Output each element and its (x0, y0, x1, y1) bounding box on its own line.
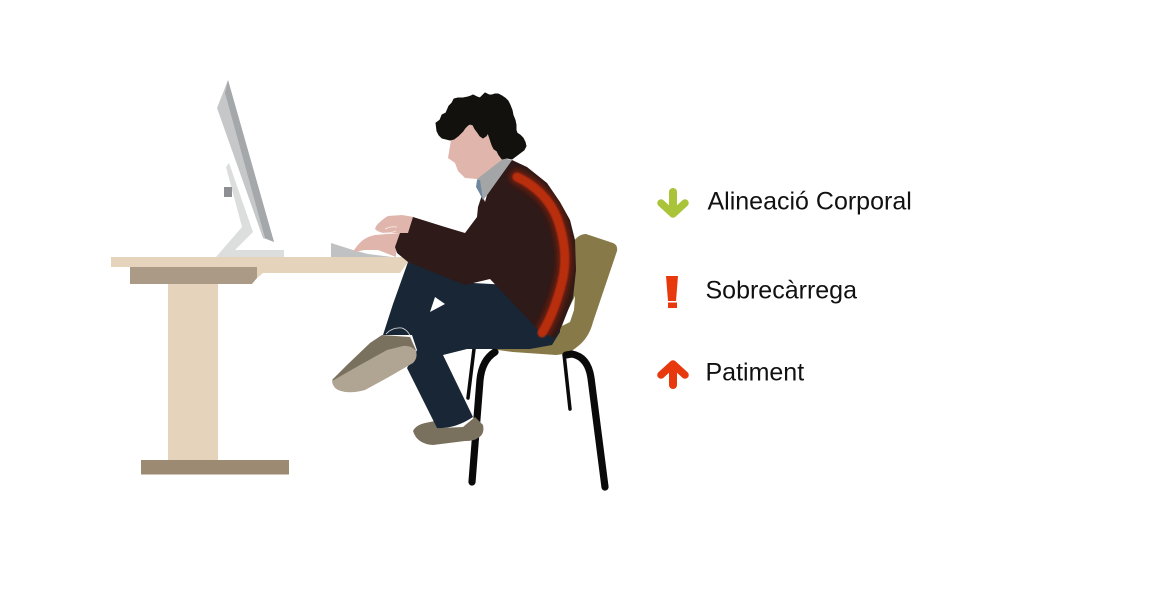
icon: green down arrow (661, 192, 685, 214)
upper shoe (332, 335, 417, 392)
jeans (383, 262, 560, 428)
chair shell (483, 234, 617, 355)
legend item: Sobrecàrrega (666, 276, 857, 308)
legend item: Alineació Corporal: Alineació Corporal (708, 188, 912, 216)
trouser cuff line (386, 328, 412, 342)
sweater (395, 160, 576, 338)
hair (436, 93, 526, 159)
finger gap (384, 227, 397, 233)
legend item: Patiment: Patiment (706, 358, 804, 386)
legend (661, 188, 912, 386)
shirt collar (476, 158, 512, 200)
gap between back and chair (562, 296, 575, 326)
desk (111, 257, 408, 474)
chair front legs (472, 352, 605, 487)
gap under knee (430, 297, 445, 312)
face (448, 122, 503, 179)
chair (468, 234, 617, 487)
legend item: Sobrecàrrega: Sobrecàrrega (706, 276, 857, 304)
red strain band along spine (517, 177, 565, 333)
monitor (216, 80, 284, 257)
chair thin rear legs (468, 349, 570, 409)
person (331, 93, 576, 445)
hands and keyboard (331, 215, 414, 257)
icon: red up arrow (661, 364, 685, 385)
lower shoe (413, 417, 483, 445)
legend item: Patiment (661, 358, 804, 386)
icon: red exclamation mark (666, 276, 678, 308)
infographic: seated posture at a desk (111, 80, 910, 491)
